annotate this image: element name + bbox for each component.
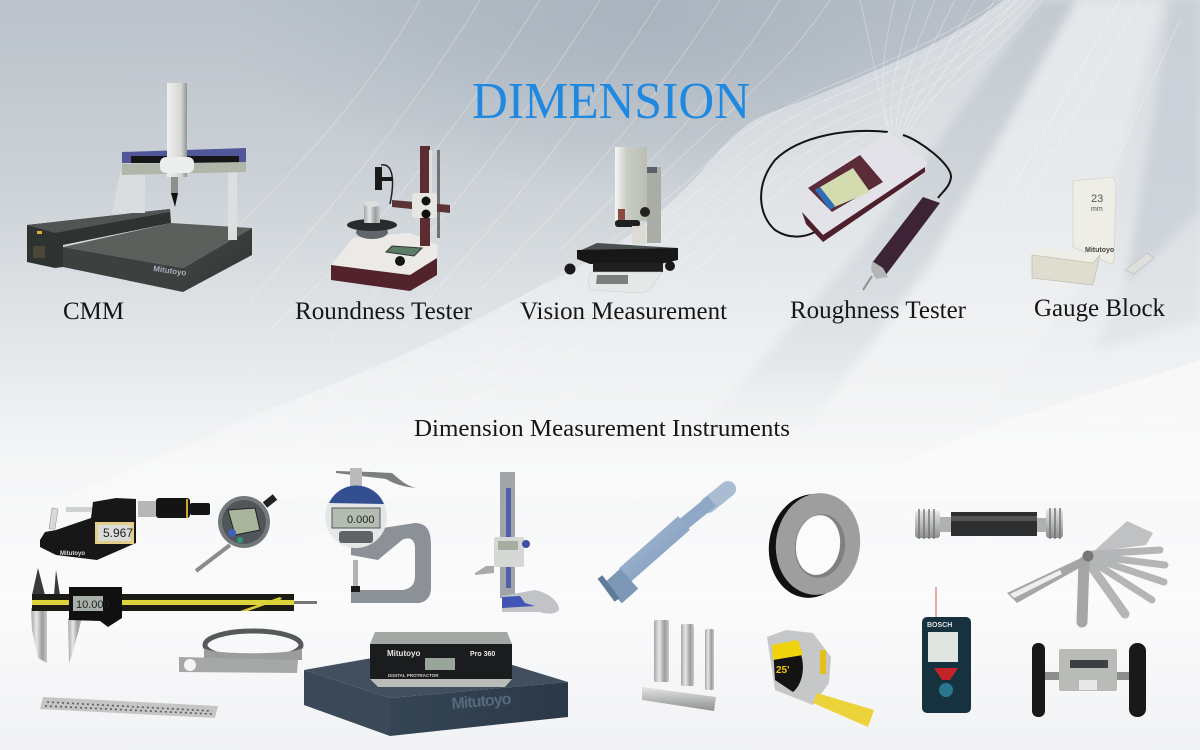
instrument: pi tape <box>179 631 302 673</box>
label: CMM: CMM <box>63 298 124 325</box>
spindle and thimble <box>66 498 210 518</box>
instrument: feeler gauge <box>1007 521 1165 622</box>
instrument: digital indicator <box>196 496 275 571</box>
small block <box>1032 247 1100 285</box>
instrument: laser distance meter <box>922 587 971 713</box>
anvil bow <box>49 508 58 529</box>
surface plate: Mitutoyo <box>451 691 512 713</box>
protractor: DIGITAL PROTRACTOR <box>388 673 439 678</box>
instrument: micrometer <box>40 498 210 560</box>
cable <box>761 131 951 237</box>
bridge legs <box>112 172 237 240</box>
protractor <box>370 632 512 687</box>
instrument: roughness tester <box>761 131 951 290</box>
column <box>420 146 440 246</box>
carriage <box>412 193 437 218</box>
probe column <box>160 83 194 207</box>
protractor: Pro 360 <box>470 651 495 658</box>
tall block: 23 <box>1091 193 1103 205</box>
spindle <box>351 560 360 592</box>
instrument: setting ring <box>762 488 867 603</box>
detector <box>863 197 940 290</box>
scriber <box>475 566 494 575</box>
display <box>95 522 134 544</box>
detector and cable <box>375 165 393 204</box>
title: DIMENSION <box>472 73 750 130</box>
instrument: tape measure <box>767 630 874 727</box>
stage <box>564 243 678 274</box>
instrument: height gauge <box>475 472 559 614</box>
beam <box>32 594 294 611</box>
lever <box>336 468 416 492</box>
tall block <box>1073 177 1116 264</box>
instrument: roundness tester <box>331 146 450 291</box>
instrument: digital protractor on surface plate <box>304 632 568 736</box>
bridge beam <box>122 148 246 175</box>
label: roundness tester: Roundness Tester <box>295 298 473 325</box>
instrument: gauge block <box>1032 177 1154 285</box>
thin block <box>1125 253 1154 274</box>
instrument: thickness gauge <box>325 468 431 603</box>
instrument: caliper <box>31 568 317 663</box>
base <box>502 590 559 614</box>
brand: Mitutoyo <box>153 264 187 278</box>
instrument: bore gauge <box>600 489 728 600</box>
knob <box>395 256 405 266</box>
column <box>500 472 515 598</box>
display head: 10.000 <box>76 599 110 611</box>
subtitle: Dimension Measurement Instruments <box>414 416 790 442</box>
screen <box>228 508 260 535</box>
instrument: pin gauges <box>642 620 716 711</box>
upper jaws <box>32 568 60 595</box>
tall block: Mitutoyo <box>1085 247 1114 254</box>
label: vision measurement: Vision Measurement <box>520 298 727 325</box>
body <box>802 132 927 242</box>
tall block: mm <box>1091 206 1103 213</box>
protractor: Mitutoyo <box>387 649 420 658</box>
label: roughness tester: Roughness Tester <box>790 297 967 324</box>
maroon bottom <box>331 258 437 291</box>
surface plate <box>304 653 568 736</box>
instrument: vision measurement <box>564 147 678 293</box>
depth rod <box>290 601 317 604</box>
instrument: wheel counter <box>1032 643 1146 717</box>
granite base plate <box>27 209 252 292</box>
dial: 0.000 <box>347 514 375 526</box>
frame <box>40 498 136 560</box>
display head <box>69 587 122 627</box>
buttons <box>228 529 236 537</box>
label: gauge block: Gauge Block <box>1034 295 1165 322</box>
lower sliding jaw <box>68 618 82 663</box>
display: 5.967 <box>103 526 133 540</box>
screen <box>386 246 422 256</box>
turntable <box>347 201 397 239</box>
lower fixed jaw <box>31 608 47 663</box>
frame <box>351 523 431 603</box>
instrument: tape measure: 25' <box>776 665 790 676</box>
instrument: laser distance meter: BOSCH <box>927 622 952 629</box>
column <box>615 147 661 244</box>
cross arm <box>392 200 450 213</box>
brand: Mitutoyo <box>60 551 85 557</box>
white base <box>331 233 438 275</box>
base <box>588 272 662 293</box>
instrument: thread plug gauge <box>915 508 1063 539</box>
instrument: CMM <box>27 83 252 292</box>
slider display <box>494 537 530 567</box>
instrument: steel ruler <box>40 697 218 718</box>
